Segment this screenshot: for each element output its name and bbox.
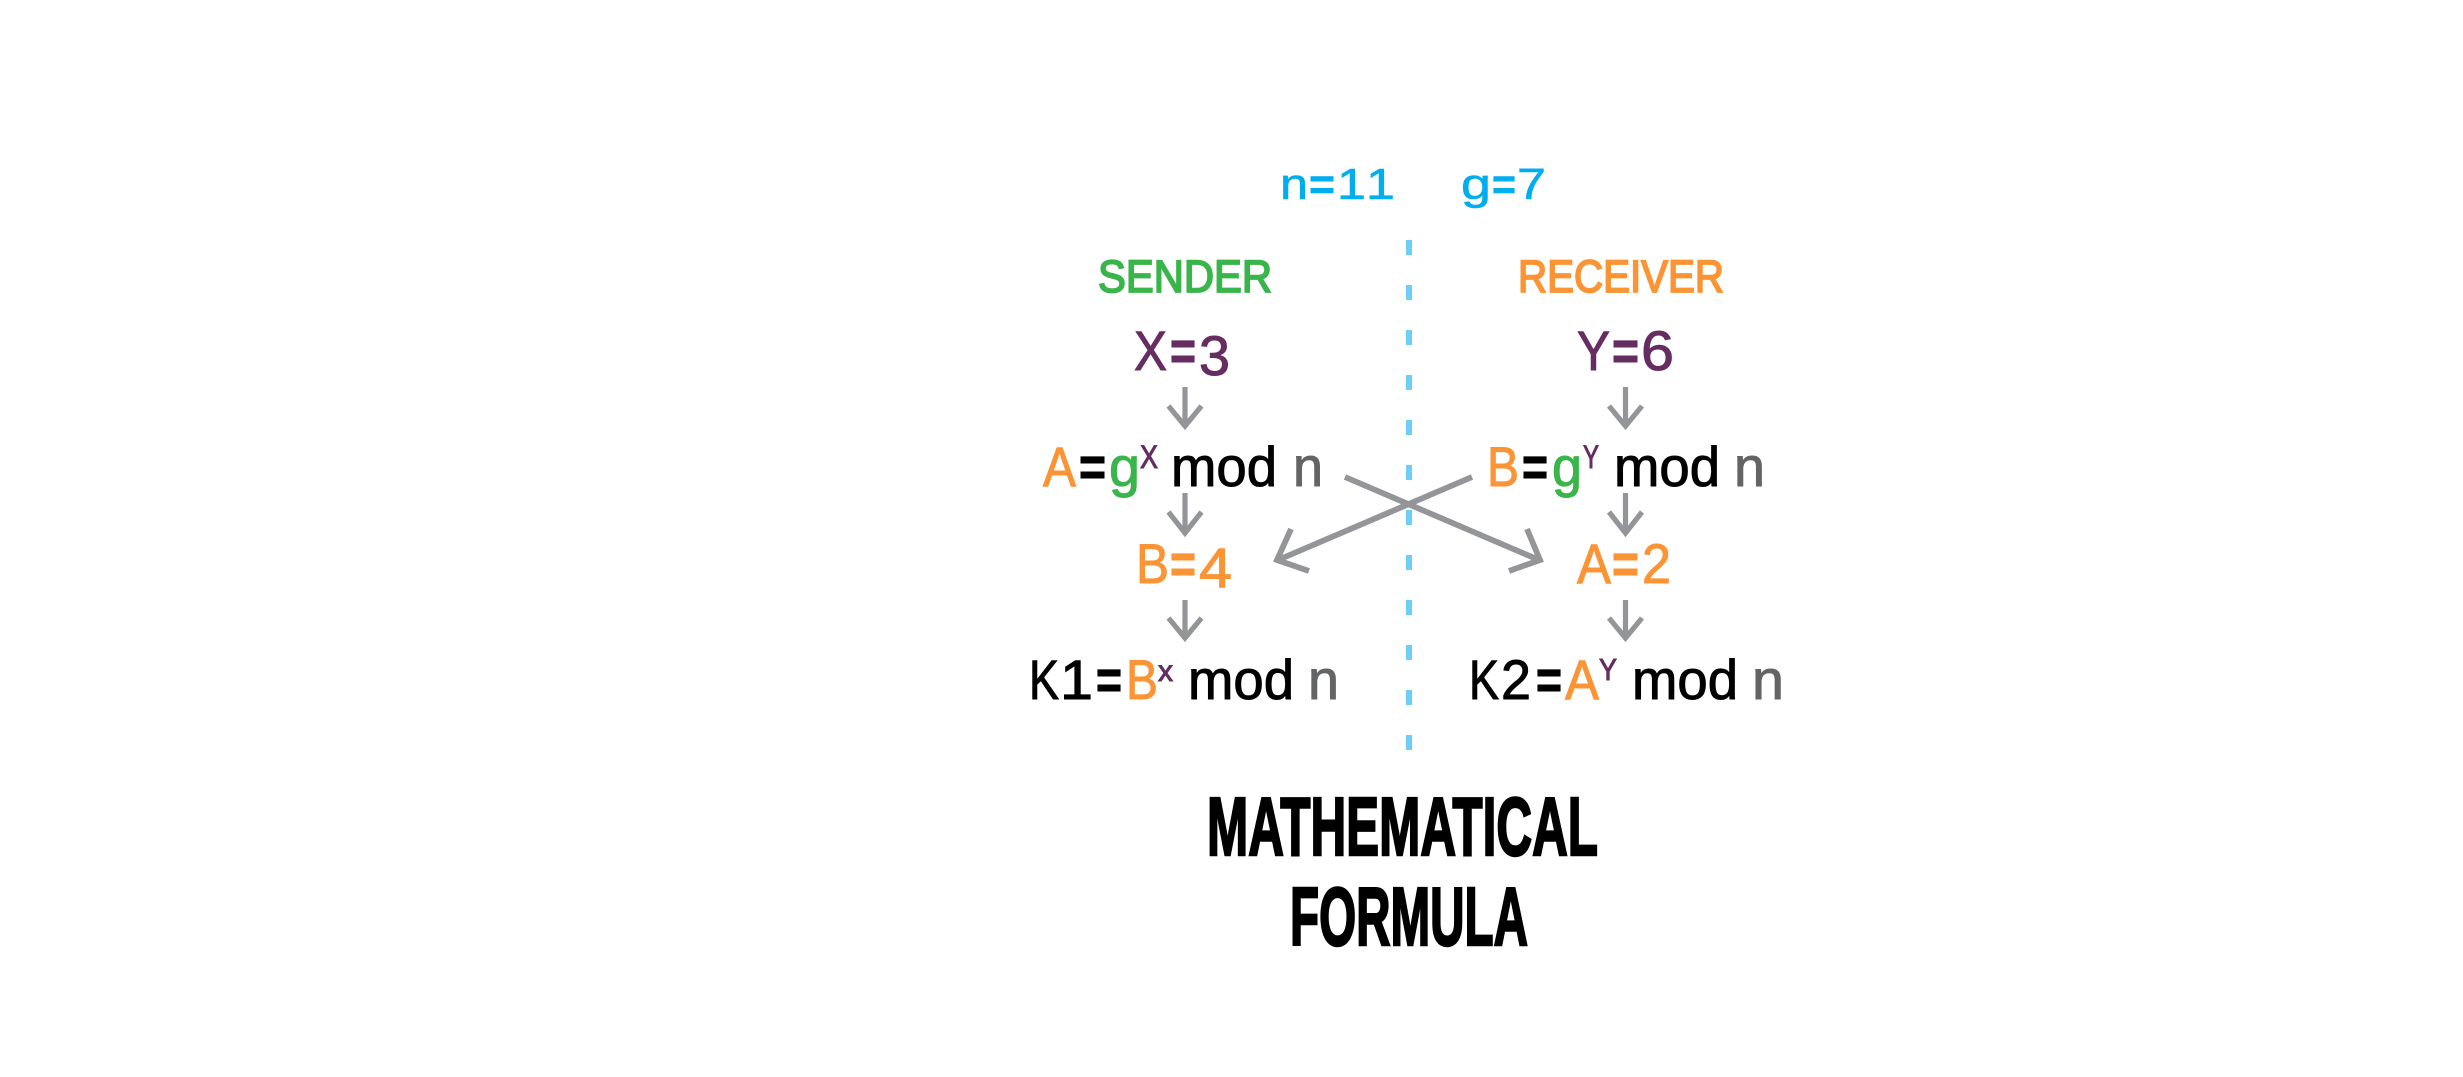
sender key K1=B^x mod n: mod xyxy=(1188,648,1294,711)
arrow: sender step 1 xyxy=(1168,387,1202,426)
sender formula A=g^X mod n: g xyxy=(1109,435,1140,498)
parameter g=7: g xyxy=(1461,160,1491,209)
arrow: receiver step 2 xyxy=(1609,493,1642,533)
sender formula A=g^X mod n: n xyxy=(1293,435,1323,498)
receiver key K2=A^Y mod n: mod xyxy=(1632,648,1738,711)
received value A=2: 2 xyxy=(1642,532,1671,595)
sender key K1=B^x mod n: 1 xyxy=(1060,648,1093,711)
title: MATHEMATICAL xyxy=(1207,780,1598,873)
parameter n=11: 1 xyxy=(1337,160,1366,209)
sender key K1=B^x mod n: n xyxy=(1308,648,1339,711)
sender formula A=g^X mod n: X xyxy=(1140,439,1158,475)
sender key K1=B^x mod n: B xyxy=(1126,648,1158,711)
receiver key K2=A^Y mod n: K xyxy=(1469,648,1499,711)
receiver formula B=g^Y mod n: B xyxy=(1487,435,1519,498)
arrow: A crosses to receiver xyxy=(1345,477,1540,571)
received value B=4: = xyxy=(1170,532,1196,595)
sender key K1=B^x mod n: K xyxy=(1029,648,1059,711)
receiver key K2=A^Y mod n: 2 xyxy=(1501,648,1531,711)
heading: receiver: RECEIVER xyxy=(1518,251,1724,302)
arrow: B crosses to sender xyxy=(1277,477,1472,571)
sender secret X=3: 3 xyxy=(1199,324,1230,387)
receiver formula B=g^Y mod n: g xyxy=(1552,435,1582,498)
sender formula A=g^X mod n: A xyxy=(1043,435,1077,498)
arrow: sender step 3 xyxy=(1168,600,1202,638)
sender secret X=3: X xyxy=(1134,319,1167,382)
parameter g=7: = xyxy=(1492,160,1516,209)
receiver formula B=g^Y mod n: = xyxy=(1522,435,1548,498)
parameter n=11: n xyxy=(1280,160,1308,209)
sender secret X=3: = xyxy=(1170,319,1196,382)
parameter n=11: 1 xyxy=(1366,160,1395,209)
receiver formula B=g^Y mod n: Y xyxy=(1583,439,1599,475)
receiver secret Y=6: 6 xyxy=(1641,319,1674,382)
sender key K1=B^x mod n: = xyxy=(1096,648,1122,711)
arrow: sender step 2 xyxy=(1168,493,1202,533)
receiver key K2=A^Y mod n: Y xyxy=(1599,652,1617,687)
arrow: receiver step 1 xyxy=(1609,387,1642,426)
received value A=2: A xyxy=(1577,532,1612,595)
received value A=2: = xyxy=(1612,532,1639,595)
sender formula A=g^X mod n: = xyxy=(1079,435,1106,498)
receiver key K2=A^Y mod n: = xyxy=(1536,648,1562,711)
arrow: receiver step 3 xyxy=(1609,600,1642,638)
sender formula A=g^X mod n: mod xyxy=(1171,435,1277,498)
receiver formula B=g^Y mod n: n xyxy=(1734,435,1765,498)
received value B=4: B xyxy=(1136,532,1169,595)
receiver secret Y=6: = xyxy=(1612,319,1639,382)
parameter n=11: = xyxy=(1309,160,1335,209)
receiver key K2=A^Y mod n: n xyxy=(1752,648,1784,711)
title: FORMULA xyxy=(1290,870,1528,963)
received value B=4: 4 xyxy=(1199,536,1232,599)
receiver secret Y=6: Y xyxy=(1577,319,1610,382)
parameter g=7: 7 xyxy=(1517,160,1546,209)
title xyxy=(1207,780,1598,963)
receiver key K2=A^Y mod n: A xyxy=(1565,648,1600,711)
receiver formula B=g^Y mod n: mod xyxy=(1614,435,1720,498)
sender key K1=B^x mod n: x xyxy=(1158,655,1173,688)
heading: sender: SENDER xyxy=(1098,251,1272,302)
